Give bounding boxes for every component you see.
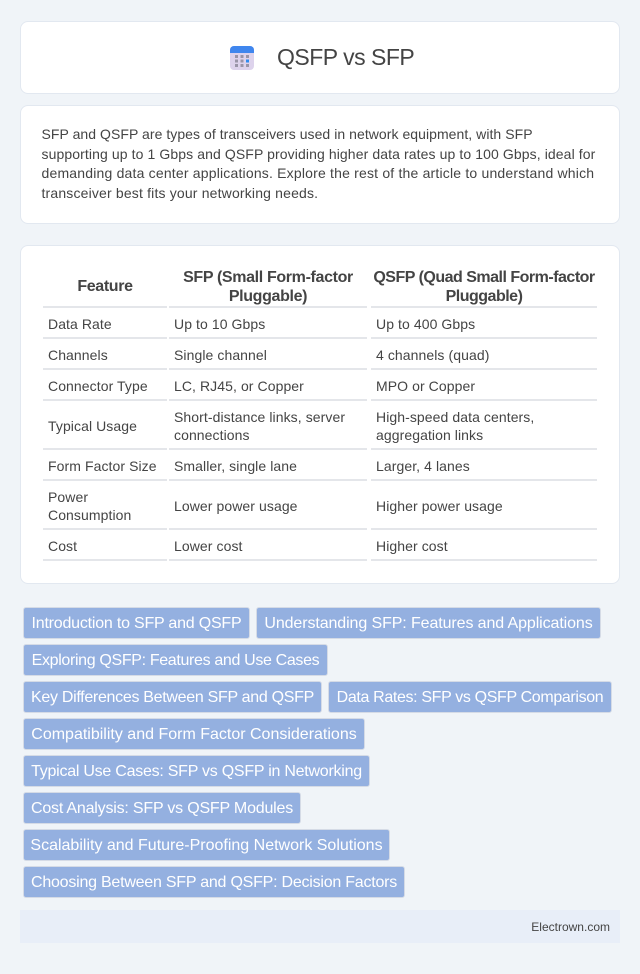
tag — [23, 792, 301, 824]
row: power consumption — [48, 489, 503, 523]
tag — [328, 681, 612, 713]
tag — [23, 607, 250, 639]
comparison table panel — [20, 245, 620, 584]
row: cost: Cost — [48, 538, 77, 554]
tag: Exploring QSFP: Features and Use Cases — [32, 652, 319, 669]
table header: Pluggable) — [229, 288, 307, 305]
row: channels: Single channel — [174, 347, 267, 363]
row: form factor size: Smaller, single lane — [174, 458, 297, 474]
footer — [20, 910, 620, 943]
row: power consumption: Consumption — [48, 507, 131, 523]
tag: Compatibility and Form Factor Considerations — [31, 726, 357, 743]
row: cost — [48, 538, 448, 554]
row: connector type: MPO or Copper — [376, 378, 475, 394]
intro paragraph: supporting up to 1 Gbps and QSFP providing higher data rates up to 100 Gbps, ideal for — [42, 146, 595, 162]
tag list — [23, 607, 612, 898]
row: typical usage: connections — [174, 427, 250, 443]
row: data rate: Up to 400 Gbps — [376, 316, 475, 332]
row: data rate — [48, 316, 475, 332]
tag — [23, 829, 390, 861]
row: typical usage: Typical Usage — [48, 418, 137, 434]
row: form factor size: Form Factor Size — [48, 458, 157, 474]
table header: Pluggable) — [446, 288, 522, 305]
row: typical usage: aggregation links — [376, 427, 483, 443]
tag: Key Differences Between SFP and QSFP — [31, 689, 314, 706]
row: power consumption: Higher power usage — [376, 498, 503, 514]
intro paragraph: SFP and QSFP are types of transceivers used in network equipment, with SFP — [42, 126, 533, 142]
row: typical usage: High-speed data centers, — [376, 409, 534, 425]
row: connector type: Connector Type — [48, 378, 148, 394]
row: channels: 4 channels (quad) — [376, 347, 489, 363]
row: cost: Lower cost — [174, 538, 242, 554]
intro paragraph: transceiver best fits your networking needs. — [42, 185, 318, 201]
tag — [23, 718, 365, 750]
header card — [20, 21, 620, 94]
row: channels: Channels — [48, 347, 108, 363]
row: connector type — [48, 378, 475, 394]
tag — [256, 607, 601, 639]
row: power consumption: Lower power usage — [174, 498, 298, 514]
row: data rate: Data Rate — [48, 316, 112, 332]
tag — [23, 644, 328, 676]
table header: SFP (Small Form-factor — [183, 269, 353, 286]
tag: Introduction to SFP and QSFP — [32, 615, 241, 632]
tag: Data Rates: SFP vs QSFP Comparison — [337, 689, 603, 706]
row: form factor size — [48, 458, 470, 474]
intro text panel — [20, 105, 620, 224]
row: form factor size: Larger, 4 lanes — [376, 458, 470, 474]
table header: QSFP (Quad Small Form-factor — [373, 269, 595, 286]
tag: Typical Use Cases: SFP vs QSFP in Networking — [31, 763, 362, 780]
tag: Choosing Between SFP and QSFP: Decision Factors — [31, 874, 397, 891]
footer brand: Electrown.com — [531, 920, 610, 934]
row: data rate: Up to 10 Gbps — [174, 316, 265, 332]
row: connector type: LC, RJ45, or Copper — [174, 378, 304, 394]
row: cost: Higher cost — [376, 538, 448, 554]
row: power consumption: Power — [48, 489, 88, 505]
tag: Understanding SFP: Features and Applications — [264, 615, 593, 632]
tag — [23, 681, 322, 713]
tag — [23, 866, 405, 898]
tag: Cost Analysis: SFP vs QSFP Modules — [31, 800, 293, 817]
intro paragraph: demanding data center applications. Explore the rest of the article to understand which — [42, 165, 594, 181]
tag: Scalability and Future-Proofing Network Solutions — [30, 837, 383, 854]
row: typical usage: Short-distance links, server — [174, 409, 345, 425]
title: QSFP vs SFP — [277, 44, 414, 70]
tag — [23, 755, 370, 787]
row: channels — [48, 347, 489, 363]
table header: Feature — [77, 278, 133, 295]
table header — [77, 269, 595, 305]
intro paragraph — [42, 126, 596, 201]
row: typical usage — [48, 409, 534, 443]
icon: calendar — [230, 46, 254, 70]
